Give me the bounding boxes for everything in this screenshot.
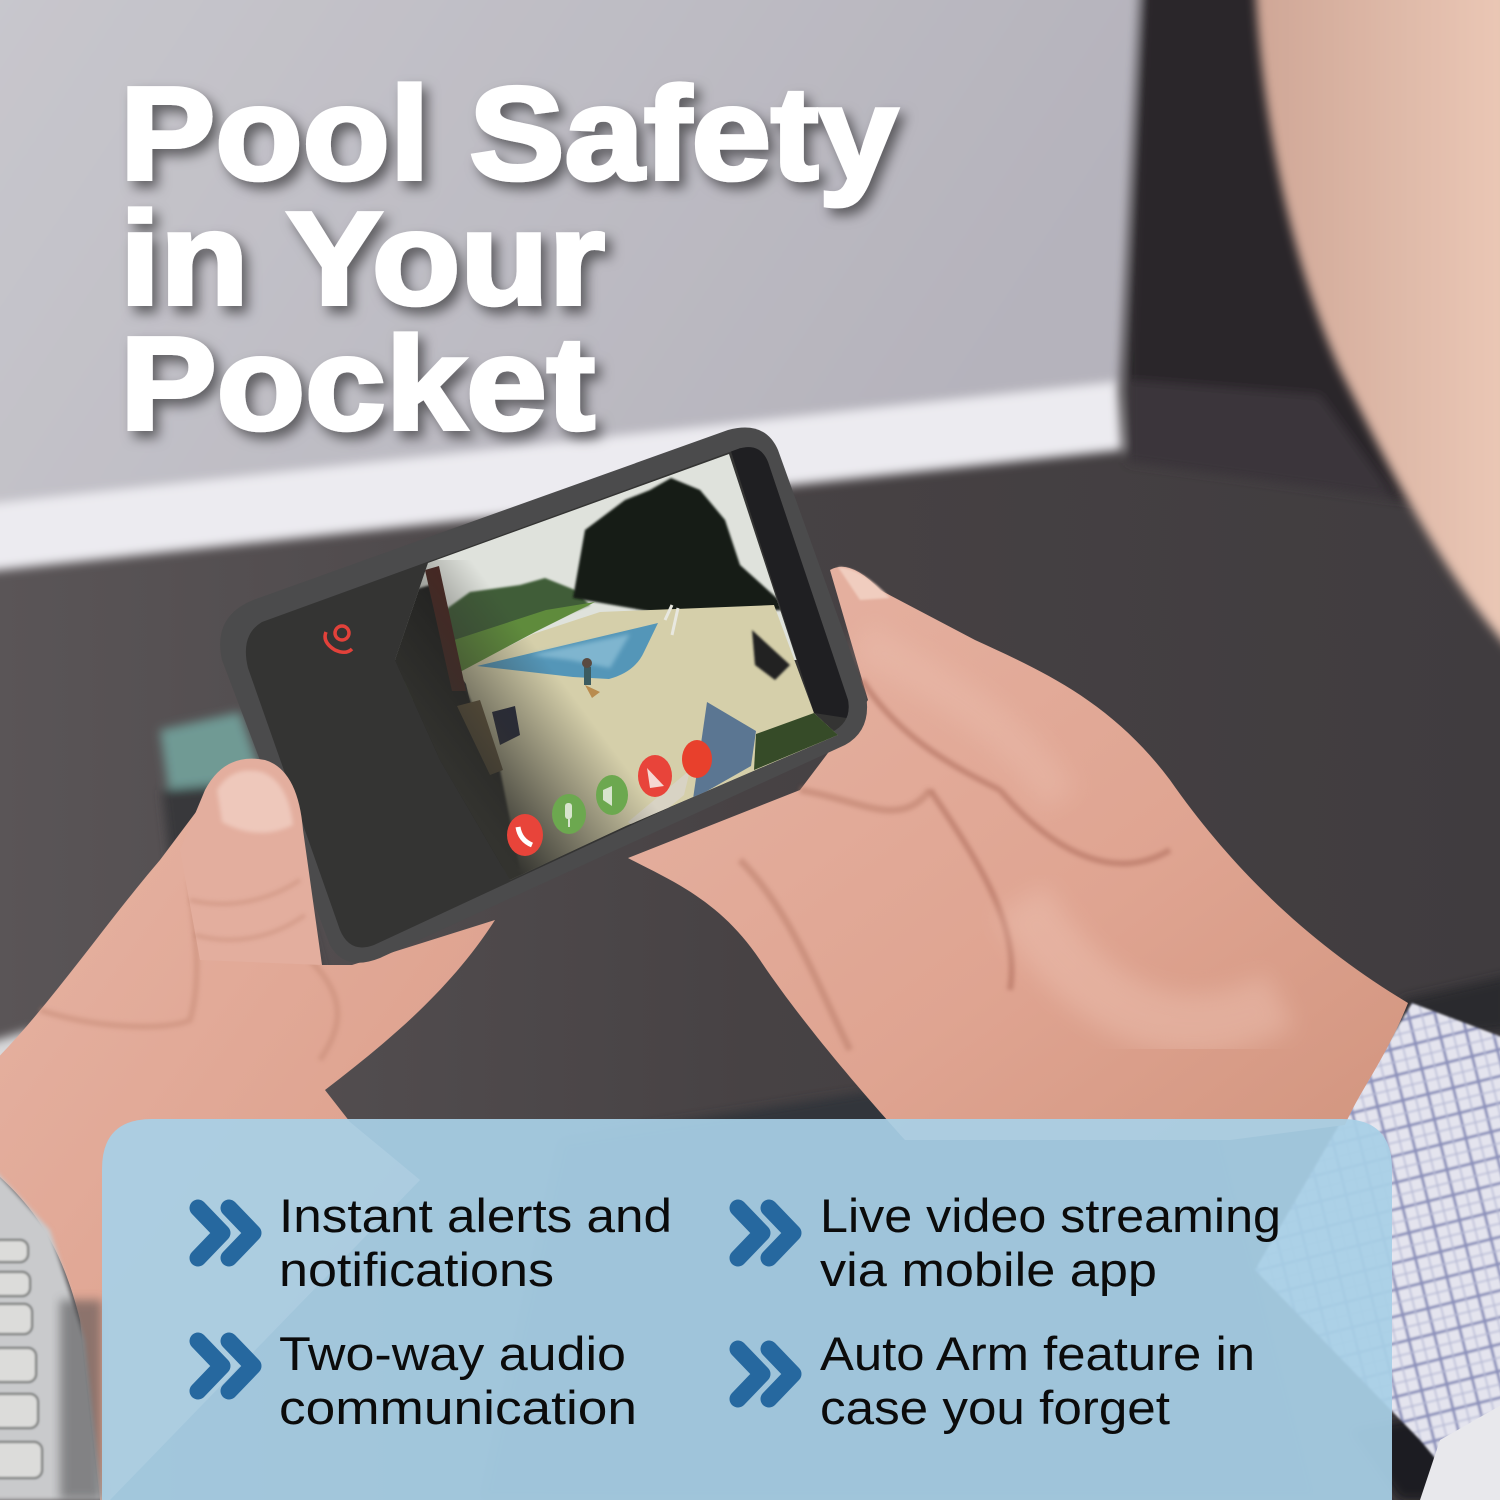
stacked furniture (457, 700, 503, 775)
feature: instant alerts: Instant alerts and (279, 1189, 672, 1242)
distant bushes (448, 576, 591, 640)
porch (395, 584, 516, 857)
deck (458, 605, 838, 880)
furniture right (752, 630, 790, 680)
hedge (403, 602, 595, 702)
bell mute (638, 755, 672, 797)
title: in Your (120, 185, 605, 332)
right bezel dark (731, 447, 849, 718)
pool (477, 623, 658, 679)
child (582, 658, 600, 698)
phone (220, 428, 867, 963)
feature: instant alerts: notifications (279, 1243, 554, 1296)
feature: live video: via mobile app (820, 1243, 1157, 1296)
controls (507, 740, 712, 856)
call icon (325, 626, 352, 652)
feature: instant alerts (198, 1189, 672, 1296)
feature panel (102, 1119, 1392, 1500)
title: Pool Safety (120, 60, 898, 207)
sky (395, 454, 797, 660)
microphone (552, 794, 586, 834)
icon: double chevron (198, 1208, 253, 1258)
feature: auto arm: Auto Arm feature in (820, 1327, 1255, 1380)
feature: two-way audio: communication (279, 1381, 637, 1434)
fade to screen (395, 560, 652, 880)
feature: live video (738, 1189, 1281, 1296)
phone screen (246, 447, 849, 947)
record (682, 740, 712, 778)
feature: auto arm: case you forget (820, 1381, 1170, 1434)
thumb (180, 759, 322, 965)
phone body (220, 428, 867, 963)
end call (507, 814, 543, 856)
right hand (628, 567, 1408, 1140)
feature: auto arm (738, 1327, 1255, 1434)
head (1255, 0, 1500, 650)
bush (754, 713, 838, 770)
title (120, 60, 898, 457)
left hand (0, 800, 495, 1500)
icon: double chevron (198, 1341, 253, 1391)
icon: double chevron (738, 1349, 793, 1399)
bench (693, 702, 756, 799)
trees (573, 478, 790, 612)
title: Pocket (120, 310, 595, 457)
feature: live video: Live video streaming (820, 1189, 1281, 1242)
stripes (628, 773, 689, 824)
shirt cuff (1255, 1003, 1500, 1500)
live pool video (395, 454, 838, 880)
ladder (665, 605, 678, 635)
feature: two-way audio: Two-way audio (279, 1327, 626, 1380)
feature: two-way audio (198, 1327, 637, 1434)
speaker (596, 775, 628, 815)
calculator (0, 1165, 102, 1500)
keyboard and calculator (480, 975, 1500, 1500)
chair (492, 706, 520, 745)
icon: double chevron (738, 1208, 793, 1258)
